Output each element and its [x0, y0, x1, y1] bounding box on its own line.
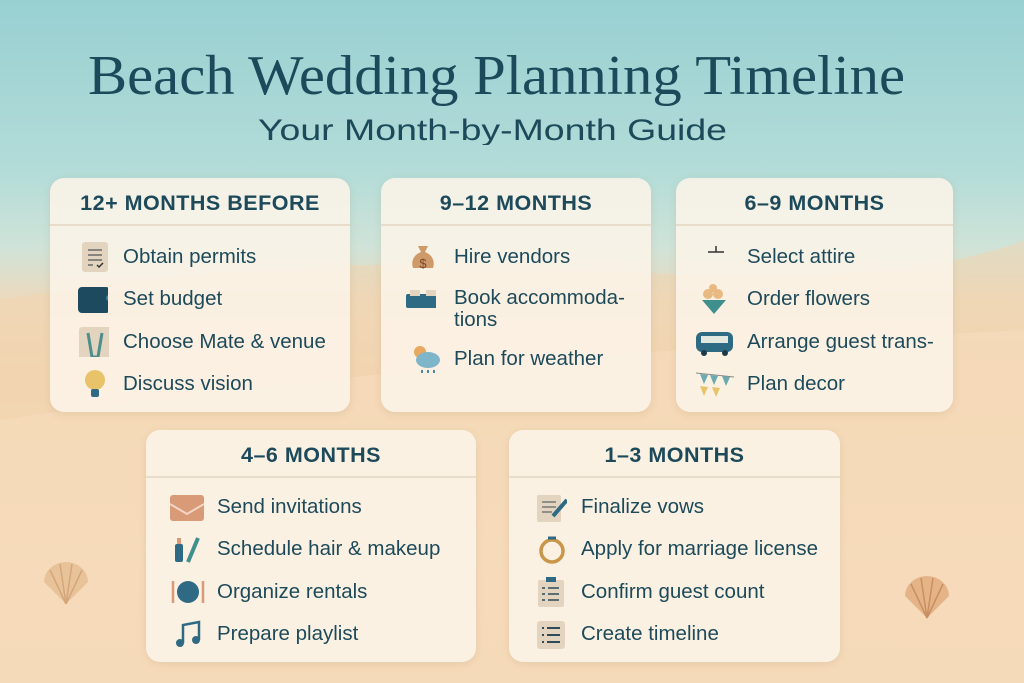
item: arrange guest transport — [696, 330, 934, 356]
item: schedule hair makeup: Schedule hair & makeup — [217, 537, 440, 560]
item: choose date — [79, 327, 326, 357]
item: confirm guest count — [538, 577, 764, 607]
item: plan decor — [696, 372, 845, 397]
heading: 1-3 — [509, 430, 840, 478]
item: prepare playlist — [176, 620, 358, 647]
item: hire vendors — [412, 245, 570, 271]
heading: 9-12 — [381, 178, 651, 226]
item: set budget: Set budget — [123, 287, 222, 310]
heading: 4-6 — [146, 430, 476, 478]
heading: 6-9 — [676, 178, 953, 226]
item: arrange guest transport: Arrange guest trans- — [747, 330, 934, 353]
item: obtain permits: Obtain permits — [123, 245, 256, 268]
item: plan for weather: Plan for weather — [454, 347, 603, 370]
heading: 9-12: 9–12 MONTHS — [440, 191, 592, 215]
item: set budget — [78, 287, 222, 313]
item: organize rentals: Organize rentals — [217, 580, 367, 603]
item: order flowers: Order flowers — [747, 287, 870, 310]
item: choose date: Choose Mate & venue — [123, 330, 326, 353]
item: send invitations — [170, 495, 362, 521]
item: plan decor: Plan decor — [747, 372, 845, 395]
heading: 1-3: 1–3 MONTHS — [604, 443, 744, 467]
panel: 12+ months — [50, 178, 350, 412]
item: hire vendors: Hire vendors — [454, 245, 570, 268]
item: finalize vows — [537, 495, 704, 522]
item: book accommodations: Book accommoda- — [454, 286, 625, 309]
item: hire vendors: $ — [419, 256, 427, 271]
panel: 1-3 months — [509, 430, 840, 662]
item: create timeline — [537, 621, 719, 649]
heading: 6-9: 6–9 MONTHS — [744, 191, 884, 215]
icon: left seashell — [44, 562, 88, 604]
item: confirm guest count: Confirm guest count — [581, 580, 764, 603]
panel: 6-9 months — [676, 178, 953, 412]
heading: 12+ months: 12+ MONTHS BEFORE — [80, 191, 320, 215]
item: discuss vision — [85, 370, 253, 397]
heading: 4-6: 4–6 MONTHS — [241, 443, 381, 467]
item: order flowers — [702, 284, 870, 314]
item: send invitations: Send invitations — [217, 495, 362, 518]
panel: 9-12 months — [381, 178, 651, 412]
item: discuss vision: Discuss vision — [123, 372, 253, 395]
item: select attire: Select attire — [747, 245, 855, 268]
item: create timeline: Create timeline — [581, 622, 719, 645]
item: plan for weather — [414, 346, 603, 373]
item: finalize vows: Finalize vows — [581, 495, 704, 518]
title: Beach Wedding Planning Timeline — [88, 45, 905, 107]
panel: 4-6 months — [146, 430, 476, 662]
item: prepare playlist: Prepare playlist — [217, 622, 358, 645]
icon: right seashell — [905, 576, 949, 618]
item: book accommodations — [406, 286, 625, 331]
item: obtain permits — [82, 242, 256, 272]
heading: 12+ months — [50, 178, 350, 226]
item: book accommodations: tions — [454, 308, 497, 331]
item: marriage license: Apply for marriage license — [581, 537, 818, 560]
